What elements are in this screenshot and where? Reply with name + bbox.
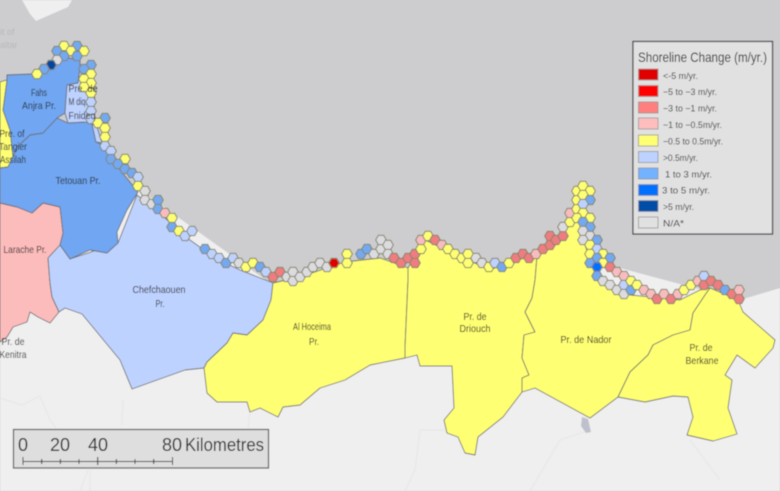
province labels: Pr. de	[690, 342, 713, 354]
province labels: Driouch	[460, 323, 491, 335]
province labels: Pr. de Nador	[560, 334, 612, 346]
province labels: Fnideq	[68, 110, 96, 122]
province labels: Chefchaouen	[132, 284, 186, 296]
province labels: Larache Pr.	[4, 244, 46, 256]
province: Berkane	[618, 288, 775, 441]
legend swatches	[638, 69, 658, 228]
legend box	[633, 42, 772, 234]
province labels: Pr.	[156, 298, 164, 310]
province: Larache	[0, 203, 63, 342]
province labels: Tangier	[0, 141, 27, 153]
province labels: Berkane	[686, 355, 719, 367]
scale labels: 0	[18, 435, 28, 455]
province labels: Anjra Pr.	[22, 100, 56, 112]
province labels	[0, 83, 719, 367]
province: Driouch	[405, 240, 537, 455]
scale box	[14, 430, 268, 468]
province labels: Fahs	[31, 87, 47, 99]
province labels: Pre. de	[68, 83, 98, 95]
legend: shoreline change	[633, 42, 772, 234]
province: Chefchaouen	[48, 195, 273, 389]
province labels: Kenitra	[0, 349, 27, 361]
legend class labels: <-5 m/yr.	[663, 71, 698, 81]
scale ruler	[23, 457, 173, 465]
scale labels: Kilometres	[185, 435, 264, 455]
faint strait label: it of	[0, 27, 15, 37]
legend class labels: 1 to 3 m/yr.	[665, 170, 712, 180]
scale labels: 80	[162, 435, 182, 455]
land at top left	[22, 0, 72, 21]
scale bar	[14, 430, 268, 468]
scale labels: 20	[50, 435, 70, 455]
land background	[0, 180, 780, 491]
legend class labels: >5 m/yr.	[663, 202, 694, 212]
province labels: Pr. de	[464, 311, 487, 323]
faint strait label: altar	[0, 40, 18, 50]
legend class labels: >0.5m/yr.	[663, 153, 698, 163]
legend class labels: −5 to −3 m/yr.	[663, 87, 717, 97]
inland borders	[0, 396, 720, 491]
province: Fahs Anjra	[3, 57, 80, 157]
province: Tetouan	[0, 118, 138, 259]
legend class labels: −1 to −0.5m/yr.	[663, 120, 722, 130]
province: M'diq Fnideq	[65, 68, 102, 143]
province: Nador	[522, 200, 710, 418]
legend class labels: −0.5 to 0.5m/yr.	[663, 136, 723, 146]
legend class labels: 3 to 5 m/yr.	[662, 186, 710, 196]
province labels: Tetouan Pr.	[56, 175, 100, 187]
shoreline change hexagon cells	[32, 41, 744, 304]
scale labels	[18, 435, 264, 455]
province labels: Pr.	[309, 336, 319, 348]
scale labels: 40	[88, 435, 108, 455]
legend class labels: N/A*	[663, 218, 685, 228]
legend class labels: −3 to −1 m/yr.	[663, 104, 717, 114]
legend class labels	[662, 71, 723, 228]
province labels: Pre. of	[0, 128, 25, 140]
province labels: Pr. de	[2, 336, 25, 348]
lake near Nador	[581, 417, 591, 433]
province: Tangier Assilah	[0, 80, 13, 168]
province labels: Assilah	[0, 154, 26, 166]
province labels: M diq.	[68, 96, 88, 108]
faint strait label	[0, 27, 18, 50]
province labels: Al Hoceima	[293, 321, 331, 333]
province: Al Hoceima	[204, 258, 408, 417]
